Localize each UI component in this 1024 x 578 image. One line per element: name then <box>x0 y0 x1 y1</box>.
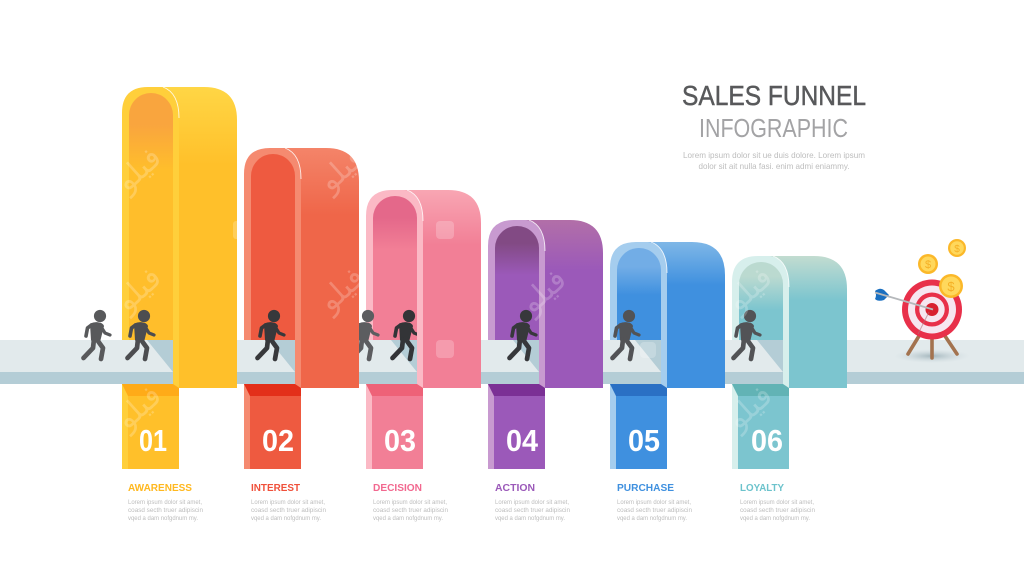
text block: awareness <box>128 482 203 522</box>
text block: decision: coasd secth truer adipiscin <box>373 507 448 514</box>
column 3 lower panel <box>366 384 423 469</box>
watermarks: فیلو <box>310 260 372 320</box>
text block: decision <box>373 482 448 522</box>
column 1 lower panel <box>122 384 179 469</box>
road: segment 3 to 4 <box>481 340 539 384</box>
road: segment 5 to 6 <box>725 340 783 384</box>
text block: purchase: PURCHASE <box>617 482 674 494</box>
target icon <box>875 239 970 363</box>
coin 1: $ <box>925 259 931 271</box>
column 1 arch <box>122 87 237 388</box>
column 5 arch <box>610 242 725 388</box>
intro text <box>683 150 865 171</box>
text block: purchase: coasd secth truer adipiscin <box>617 507 692 514</box>
walking person 8 <box>734 310 760 359</box>
column 4 lower panel <box>488 384 545 469</box>
watermarks: فیلو <box>107 378 169 438</box>
road: segment 1 to 2 <box>237 340 295 384</box>
title <box>682 80 866 143</box>
road: exit to target <box>847 340 1024 384</box>
walking person 1 <box>84 310 110 359</box>
step number 06: 06 <box>751 423 783 458</box>
text block: interest <box>251 482 326 522</box>
watermarks: فیلو <box>107 140 169 200</box>
text block: action: ACTION <box>495 482 535 494</box>
step number 02: 02 <box>262 423 294 458</box>
step number 04: 04 <box>506 423 539 458</box>
column 2 arch <box>244 148 359 388</box>
coin 2: $ <box>954 244 960 255</box>
walking person 5 <box>392 310 419 359</box>
text block: decision: DECISION <box>373 482 422 494</box>
road: wall shadows inside the arches <box>147 340 783 372</box>
arrow <box>875 289 933 334</box>
watermarks: فیلو <box>107 260 169 320</box>
text block: interest: Lorem ipsum dolor sit amet, <box>251 499 325 506</box>
column 6 arch <box>732 256 847 388</box>
column 5 lower panel <box>610 384 667 469</box>
road: segment 2 to 3 <box>359 340 417 384</box>
text block: action: coasd secth truer adipiscin <box>495 507 570 514</box>
walking person 2 <box>128 310 154 359</box>
walking person 3 <box>258 310 284 359</box>
text block: loyalty: LOYALTY <box>740 482 784 494</box>
text block: action <box>495 482 570 522</box>
text block: awareness: coasd secth truer adipiscin <box>128 507 203 514</box>
watermarks: فیلو <box>512 262 574 322</box>
text block: loyalty: coasd secth truer adipiscin <box>740 507 815 514</box>
text block: action: Lorem ipsum dolor sit amet, <box>495 499 569 506</box>
intro text: Lorem ipsum dolor sit ue duis dolore. Lorem ipsum <box>683 150 865 160</box>
text block: decision: Lorem ipsum dolor sit amet, <box>373 499 447 506</box>
text block: interest: vqed a dam nofgdnum my. <box>251 515 321 522</box>
step number 03: 03 <box>384 423 416 458</box>
text block: interest: coasd secth truer adipiscin <box>251 507 326 514</box>
text block: action: vqed a dam nofgdnum my. <box>495 515 565 522</box>
text block: decision: vqed a dam nofgdnum my. <box>373 515 443 522</box>
road: entrance to column 1 <box>0 340 173 384</box>
column 2 lower panel <box>244 384 301 469</box>
watermarks: فیلو <box>718 260 780 320</box>
text block: loyalty: Lorem ipsum dolor sit amet, <box>740 499 814 506</box>
walking person 6 <box>510 310 536 359</box>
text block: awareness: vqed a dam nofgdnum my. <box>128 515 198 522</box>
subtitle: INFOGRAPHIC <box>699 113 848 143</box>
watermarks: فیلو <box>310 140 372 200</box>
intro text: dolor sit ait nulla fasi. enim admi eniammy. <box>698 161 850 171</box>
coin 3: $ <box>947 279 955 294</box>
walking person 7 <box>612 310 639 359</box>
text block: interest: INTEREST <box>251 482 301 494</box>
watermarks: فیلو <box>718 378 780 438</box>
step number 05: 05 <box>628 423 660 458</box>
road: segment 4 to 5 <box>603 340 661 384</box>
walking person 4 <box>359 310 380 362</box>
text block: purchase: vqed a dam nofgdnum my. <box>617 515 687 522</box>
column 6 lower panel <box>732 384 789 469</box>
text block: loyalty <box>740 482 815 522</box>
title: SALES FUNNEL <box>682 80 866 111</box>
text block: awareness: AWARENESS <box>128 482 192 494</box>
text block: awareness: Lorem ipsum dolor sit amet, <box>128 499 202 506</box>
column 3 arch <box>366 190 481 388</box>
text block: purchase: Lorem ipsum dolor sit amet, <box>617 499 691 506</box>
text block: purchase <box>617 482 692 522</box>
column 4 arch <box>488 220 603 388</box>
step number 01: 01 <box>139 423 167 458</box>
text block: loyalty: vqed a dam nofgdnum my. <box>740 515 810 522</box>
watermarks <box>107 140 780 438</box>
